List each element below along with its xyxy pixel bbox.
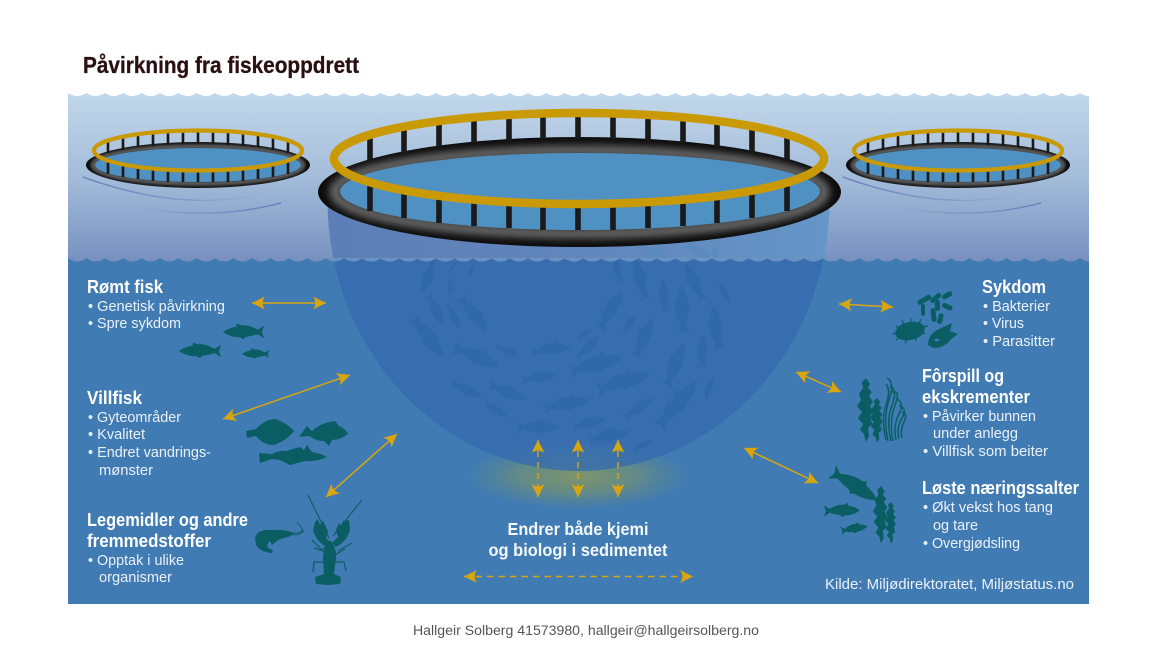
text: Fôrspill: under anlegg bbox=[933, 425, 1018, 442]
text: Legemidler: organismer bbox=[99, 569, 172, 586]
large cage bbox=[318, 113, 841, 247]
source: Kilde: Miljødirektoratet, Miljøstatus.no bbox=[825, 576, 1074, 593]
perch bbox=[299, 421, 348, 446]
footer contact: Hallgeir Solberg 41573980, hallgeir@hallgeirsolberg.no bbox=[413, 623, 759, 638]
icons: bacteria, virus, parasite bbox=[892, 290, 958, 348]
posts bbox=[108, 132, 288, 182]
top wave edge bbox=[68, 93, 1089, 98]
text: Sykdom: • Bakterier bbox=[983, 298, 1050, 315]
posts bbox=[370, 113, 787, 230]
text: Løste næringssalter: Løste næringssalter bbox=[922, 478, 1079, 498]
arrow: medicines bbox=[326, 434, 397, 497]
text: Villfisk: • Kvalitet bbox=[88, 426, 146, 443]
glow arrows: sediment spread bbox=[538, 440, 618, 497]
text: Løste næringssalter: og tare bbox=[933, 517, 978, 534]
text: Legemidler: • Opptak i ulike bbox=[88, 552, 184, 569]
icons: fish and kelp bbox=[824, 463, 896, 544]
text: Rømt fisk: • Spre sykdom bbox=[88, 315, 181, 332]
icons: seaweed bbox=[857, 378, 906, 443]
text: Rømt fisk: Rømt fisk bbox=[87, 277, 164, 297]
title: Påvirkning fra fiskeoppdrett bbox=[83, 52, 359, 78]
text: Fôrspill: • Villfisk som beiter bbox=[923, 443, 1048, 460]
gold rail bbox=[334, 113, 824, 204]
text: Rømt fisk: • Genetisk påvirkning bbox=[88, 298, 225, 315]
arrow: escaped fish bbox=[252, 302, 326, 304]
ripples bbox=[83, 177, 277, 200]
text: Fôrspill: Fôrspill og bbox=[922, 366, 1004, 386]
text: Rømt fisk bbox=[87, 277, 225, 332]
icon: lobster bbox=[308, 495, 362, 585]
arrow: feed waste bbox=[796, 372, 841, 392]
text: sediment: og biologi i sedimentet bbox=[488, 540, 668, 560]
text: Løste næringssalter bbox=[922, 478, 1079, 552]
flounder bbox=[246, 419, 294, 445]
text: Sykdom: • Virus bbox=[983, 315, 1024, 332]
text: Villfisk: mønster bbox=[99, 462, 153, 479]
text: Løste næringssalter: • Overgjødsling bbox=[923, 535, 1020, 552]
text: Løste næringssalter: • Økt vekst hos tang bbox=[923, 499, 1053, 516]
text: sediment bbox=[488, 519, 668, 560]
text: Villfisk bbox=[87, 388, 211, 479]
floating ring bbox=[86, 142, 310, 188]
water inside ring bbox=[95, 148, 301, 182]
text: Fôrspill: ekskrementer bbox=[922, 387, 1030, 407]
arrow: nutrients bbox=[744, 448, 818, 483]
small cage right bbox=[843, 130, 1070, 213]
text: Villfisk: • Endret vandrings- bbox=[88, 444, 211, 461]
text: Villfisk: • Gyteområder bbox=[88, 409, 181, 426]
arrow: horizontal sediment spread bbox=[464, 576, 693, 578]
text: Legemidler bbox=[87, 510, 248, 586]
text: Fôrspill bbox=[922, 366, 1048, 460]
text: Legemidler: Legemidler og andre bbox=[87, 510, 248, 530]
small cage left bbox=[83, 130, 310, 213]
text: Fôrspill: • Påvirker bunnen bbox=[923, 408, 1036, 425]
text: sediment: Endrer både kjemi bbox=[508, 519, 648, 539]
icons: wild fish bbox=[246, 419, 348, 465]
icons: salmon bbox=[179, 323, 269, 359]
faint fish near the surface bbox=[638, 239, 721, 263]
waterline waves over net bbox=[331, 258, 826, 263]
text: Villfisk: Villfisk bbox=[87, 388, 143, 408]
school of fish in the net bbox=[406, 257, 733, 453]
net enclosure below water bbox=[334, 258, 824, 471]
text: Legemidler: fremmedstoffer bbox=[87, 531, 211, 551]
arrow: disease bbox=[839, 304, 893, 307]
floating ring bbox=[318, 137, 841, 247]
arrow: wild fish bbox=[223, 375, 350, 419]
text: Sykdom: • Parasitter bbox=[983, 333, 1055, 350]
cod bbox=[259, 445, 327, 465]
net enclosure above water bbox=[328, 206, 830, 260]
waterline waves outside net bbox=[68, 258, 1089, 263]
infographic: impact of fish farming bbox=[68, 53, 1089, 638]
text: Sykdom: Sykdom bbox=[982, 277, 1046, 297]
panel: water bbox=[68, 258, 1089, 604]
panel: sky above water bbox=[68, 93, 1089, 263]
water inside ring bbox=[340, 153, 820, 230]
text: Sykdom bbox=[982, 277, 1055, 350]
gold rail bbox=[94, 130, 302, 170]
icon: shrimp bbox=[255, 522, 304, 553]
sediment glow bbox=[468, 443, 688, 509]
